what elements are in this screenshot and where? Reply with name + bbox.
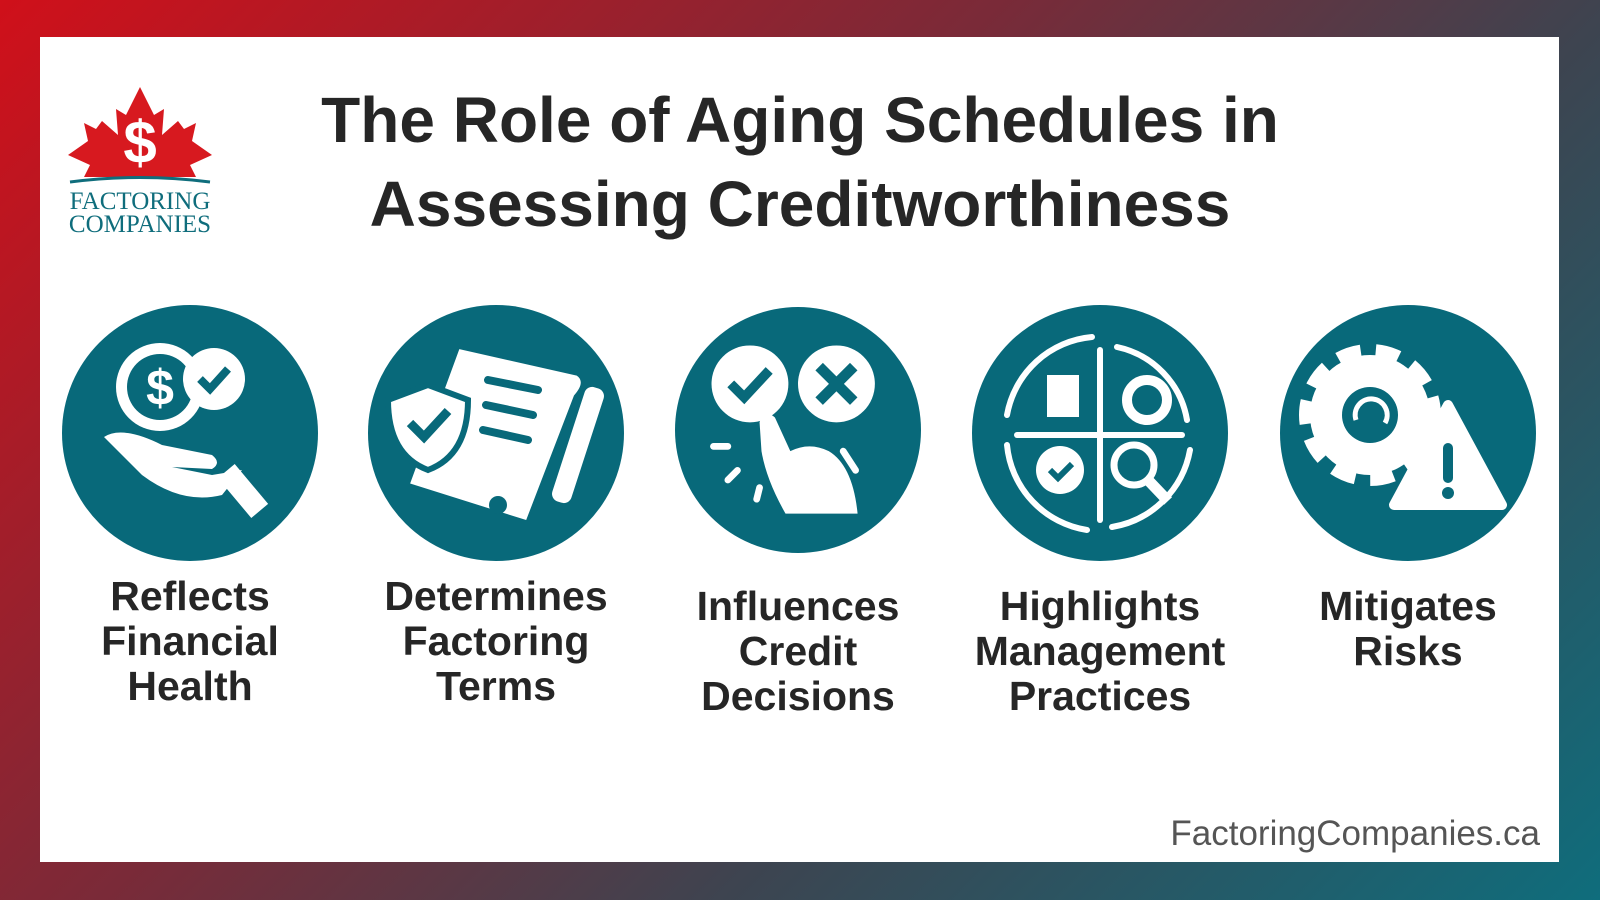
label: determines factoring terms: Factoring (403, 618, 589, 664)
logo (68, 87, 212, 238)
title (321, 84, 1279, 240)
label: reflects financial health: Financial (101, 618, 279, 664)
footer url: FactoringCompanies.ca (1170, 814, 1540, 853)
label: reflects financial health: Reflects (110, 573, 270, 619)
label: determines factoring terms: Terms (436, 663, 556, 709)
icon: management practices (cycle with four quadrants) (972, 305, 1228, 561)
label: highlights management practices: Practices (1009, 673, 1191, 719)
title: The Role of Aging Schedules in (321, 84, 1279, 156)
label: influences credit decisions (697, 583, 899, 719)
icon: credit decisions (check, cross, hand) (675, 307, 921, 553)
label: highlights management practices (975, 583, 1225, 719)
icon: financial health (hand with dollar coin) (62, 305, 318, 561)
icon: factoring terms (document with shield) (368, 305, 624, 561)
label: highlights management practices: Highlights (1000, 583, 1200, 629)
label: mitigates risks (1319, 583, 1497, 674)
icon: mitigates risks (gear with warning) (1280, 305, 1536, 561)
label: mitigates risks: Mitigates (1319, 583, 1497, 629)
label: reflects financial health (101, 573, 279, 709)
label: influences credit decisions: Credit (739, 628, 857, 674)
logo: COMPANIES (69, 211, 211, 238)
icon: financial health (hand with dollar coin): $ (146, 360, 174, 416)
label: determines factoring terms (384, 573, 608, 709)
icon: maple leaf: $ (123, 109, 157, 176)
label: determines factoring terms: Determines (384, 573, 608, 619)
title: Assessing Creditworthiness (370, 168, 1230, 240)
label: mitigates risks: Risks (1353, 628, 1463, 674)
label: highlights management practices: Management (975, 628, 1225, 674)
logo: FACTORING (70, 188, 210, 215)
label: influences credit decisions: Decisions (701, 673, 895, 719)
icon: maple leaf (68, 87, 212, 182)
label: influences credit decisions: Influences (697, 583, 899, 629)
label: reflects financial health: Health (127, 663, 253, 709)
